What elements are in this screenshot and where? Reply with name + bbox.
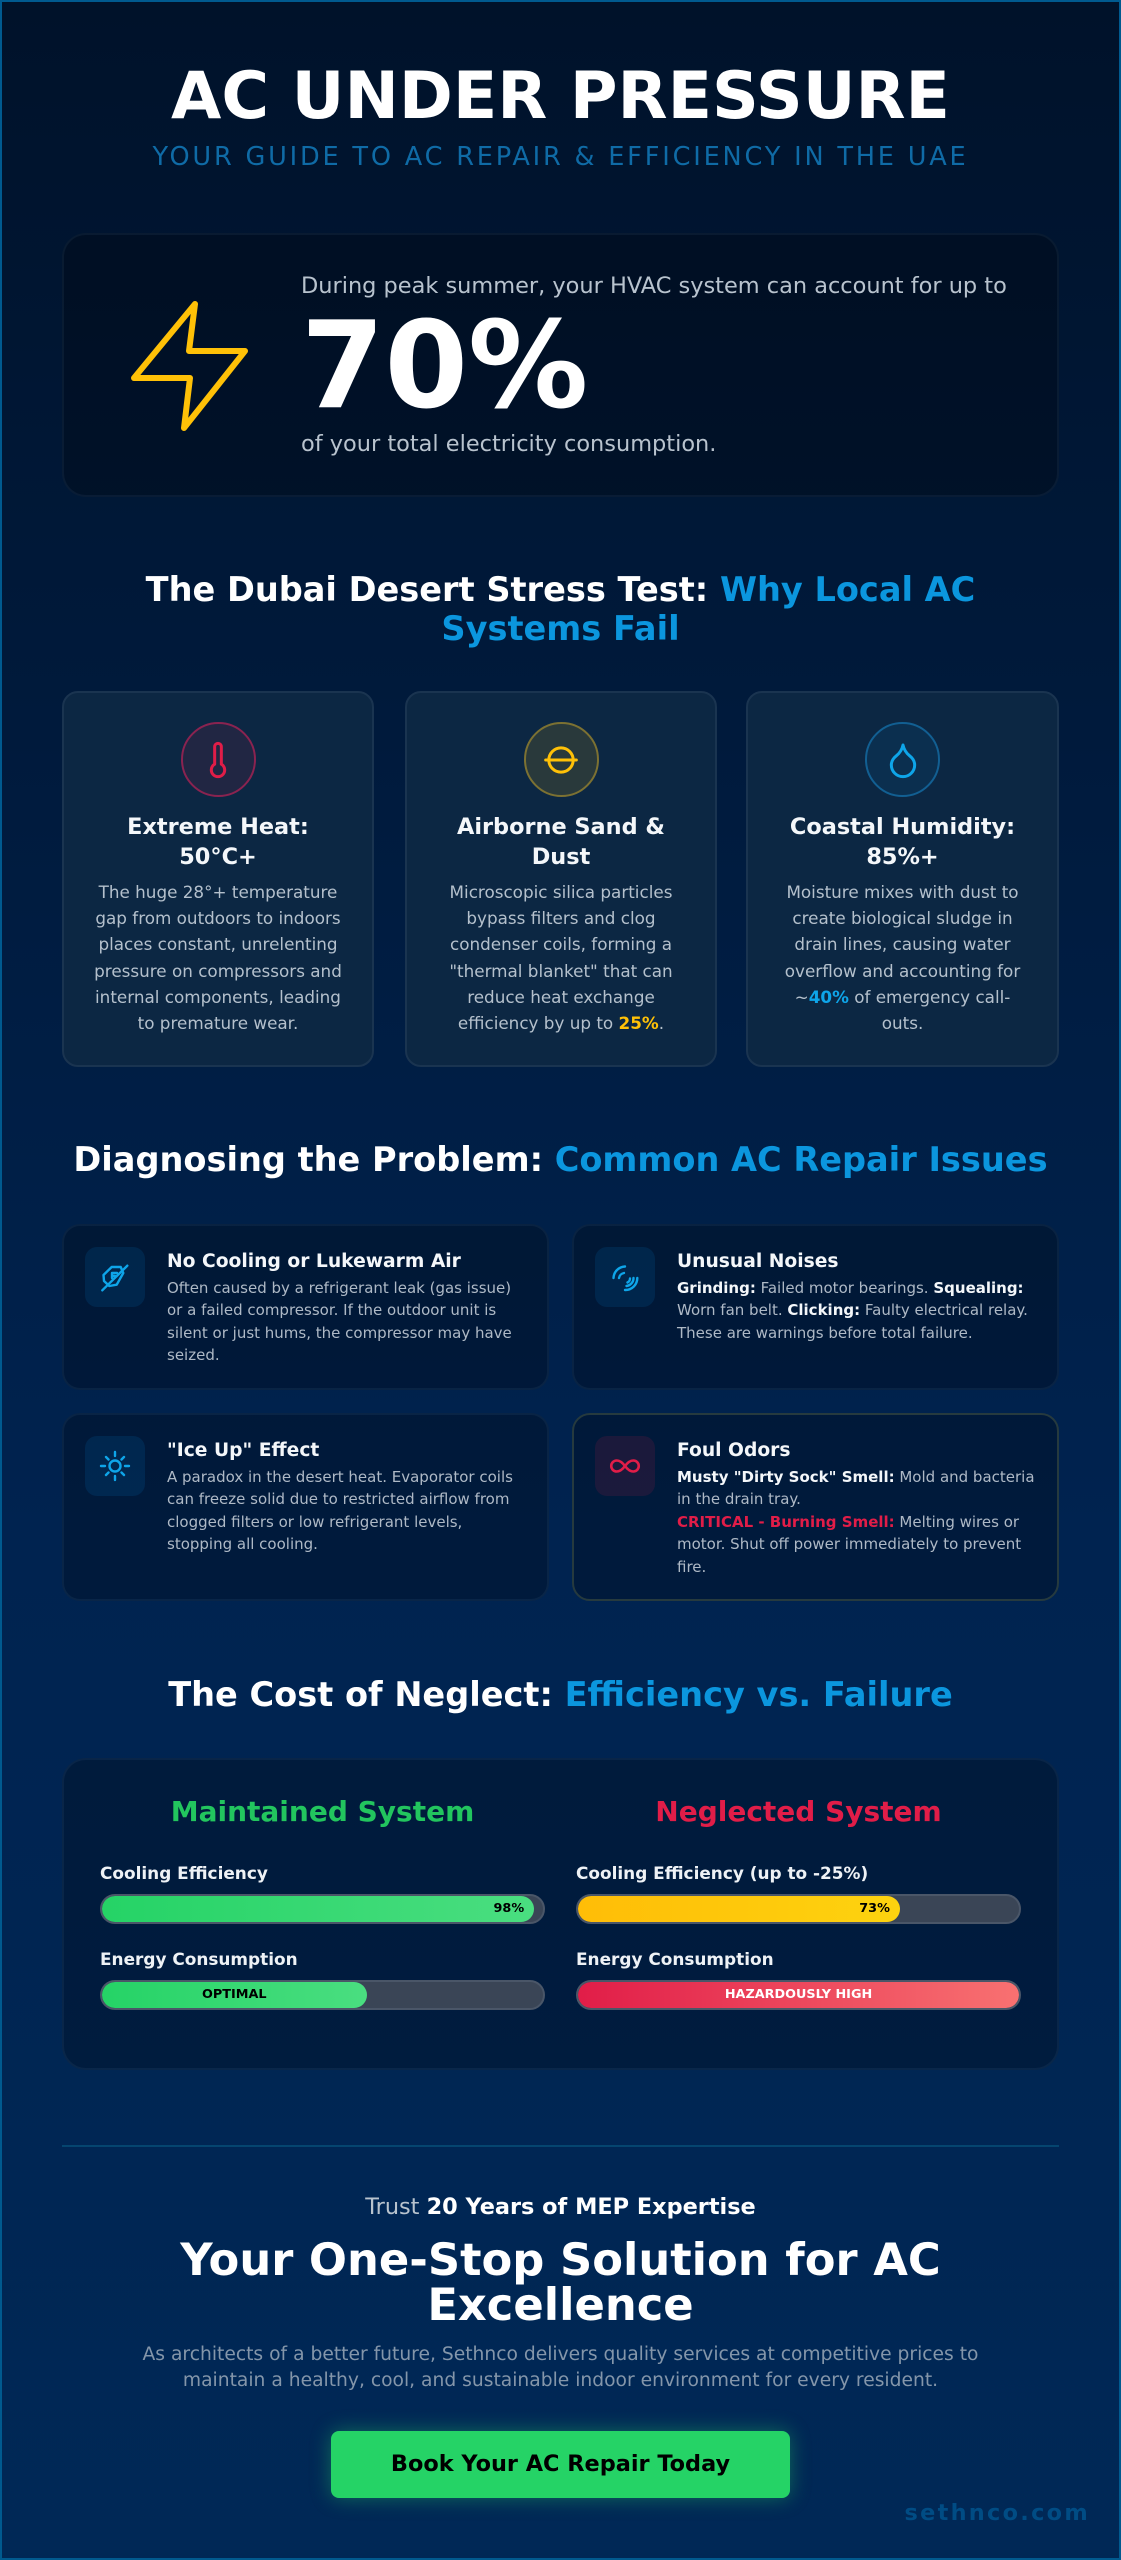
card heading	[790, 814, 1015, 870]
issue text: can freeze solid due to restricted airflow from	[167, 1490, 509, 1508]
issue text: motor. Shut off power immediately to prevent	[677, 1535, 1021, 1553]
panel: unusual noises	[572, 1224, 1059, 1390]
card text: "thermal blanket" that can	[449, 961, 673, 981]
panel: hero statistic	[62, 233, 1059, 497]
issue text: Musty "Dirty Sock" Smell: Mold and bacteria	[677, 1468, 1035, 1486]
issue text: in the drain tray.	[677, 1490, 801, 1508]
neglected system heading: Neglected System	[655, 1795, 942, 1828]
heading: desert stress test: Systems Fail	[441, 609, 680, 648]
card heading	[127, 814, 309, 870]
card text: reduce heat exchange	[467, 987, 655, 1007]
issue text: seized.	[167, 1346, 220, 1364]
bar fill hazardously high: HAZARDOUSLY HIGH	[725, 1987, 872, 2002]
bar fill 98%	[102, 1896, 534, 1922]
heading: common repair issues: Diagnosing the Problem: Common AC Repair Issues	[73, 1140, 1048, 1179]
card text	[449, 882, 673, 1033]
issue text	[167, 1279, 512, 1364]
panel: comparison	[62, 1758, 1059, 2070]
card text: ~40% of emergency call-	[795, 987, 1010, 1007]
issue text: or a failed compressor. If the outdoor unit is	[167, 1301, 496, 1319]
footer paragraph	[142, 2344, 978, 2391]
card text: efficiency by up to 25%.	[458, 1013, 664, 1033]
issue text: stopping all cooling.	[167, 1535, 318, 1553]
bar: maintained energy optimal	[100, 1980, 545, 2010]
card text: condenser coils, forming a	[450, 934, 672, 954]
bar fill optimal	[102, 1982, 367, 2008]
card text: places constant, unrelenting	[98, 934, 338, 954]
issue text: silent or just hums, the compressor may have	[167, 1324, 512, 1342]
label: maintained cooling efficiency: Cooling Efficiency	[100, 1863, 268, 1883]
card text: internal components, leading	[95, 987, 341, 1007]
icon: thermometer	[180, 722, 256, 797]
hero lead-in text: During peak summer, your HVAC system can account for up to	[301, 273, 1007, 299]
card text: bypass filters and clog	[466, 908, 656, 928]
icon: sound waves	[595, 1247, 655, 1307]
issue text: These are warnings before total failure.	[677, 1324, 973, 1342]
card text	[785, 882, 1020, 1033]
bar: maintained cooling efficiency 98%	[100, 1894, 545, 1924]
footer heading: Excellence	[427, 2278, 694, 2331]
issue heading: Foul Odors	[677, 1440, 791, 1460]
heading: desert stress test: The Dubai Desert Stress Test: Why Local AC	[146, 570, 975, 609]
issue text: Worn fan belt. Clicking: Faulty electrical relay.	[677, 1301, 1028, 1319]
bar fill 98%: 98%	[494, 1901, 524, 1916]
issue text: Often caused by a refrigerant leak (gas issue)	[167, 1279, 511, 1297]
panel: extreme heat	[62, 691, 374, 1067]
icon: sun	[85, 1436, 145, 1496]
icon: lightning bolt	[131, 301, 248, 431]
issue text: clogged filters or low refrigerant levels,	[167, 1513, 462, 1531]
card text: Microscopic silica particles	[450, 882, 672, 902]
panel: ice up effect	[62, 1413, 549, 1601]
card heading: 85%+	[866, 844, 939, 870]
issue text: fire.	[677, 1558, 706, 1576]
brand watermark: sethnco.com	[904, 2500, 1090, 2526]
issue heading: "Ice Up" Effect	[167, 1440, 319, 1460]
label: maintained energy consumption: Energy Consumption	[100, 1949, 298, 1969]
card heading: Coastal Humidity:	[790, 814, 1015, 840]
footer heading	[180, 2233, 941, 2331]
heading: desert stress test	[146, 570, 975, 648]
footer paragraph: maintain a healthy, cool, and sustainable indoor environment for every resident.	[183, 2370, 938, 2391]
label: neglected energy consumption: Energy Consumption	[576, 1949, 774, 1969]
call to action button	[331, 2431, 790, 2498]
footer heading: Your One-Stop Solution for AC	[180, 2233, 941, 2286]
label: neglected cooling efficiency: Cooling Efficiency (up to -25%)	[576, 1863, 868, 1883]
icon: infinity	[595, 1436, 655, 1496]
issue text	[677, 1468, 1035, 1576]
footer trust line: Trust 20 Years of MEP Expertise	[365, 2194, 756, 2220]
card text: drain lines, causing water	[794, 934, 1011, 954]
icon: water drop	[865, 722, 940, 797]
hero closing text: of your total electricity consumption.	[301, 431, 716, 457]
bar fill optimal: OPTIMAL	[202, 1987, 267, 2002]
panel: foul odors	[572, 1413, 1059, 1601]
card text: Moisture mixes with dust to	[786, 882, 1019, 902]
footer paragraph: As architects of a better future, Sethnco delivers quality services at competitive prices to	[143, 2344, 978, 2365]
panel: airborne sand and dust	[405, 691, 717, 1067]
issue heading: Unusual Noises	[677, 1250, 839, 1272]
icon: blocked coolant	[85, 1247, 145, 1307]
card heading: 50°C+	[179, 844, 257, 870]
subtitle: YOUR GUIDE TO AC REPAIR & EFFICIENCY IN THE UAE	[152, 142, 969, 172]
issue text: Grinding: Failed motor bearings. Squealing:	[677, 1279, 1024, 1297]
card text: create biological sludge in	[792, 908, 1013, 928]
issue text: CRITICAL - Burning Smell: Melting wires or	[677, 1513, 1019, 1531]
bar fill 73%	[578, 1896, 900, 1922]
card text: outs.	[882, 1013, 923, 1033]
card text	[94, 882, 342, 1033]
card text: pressure on compressors and	[94, 961, 342, 981]
issue heading: No Cooling or Lukewarm Air	[167, 1250, 461, 1272]
bar: neglected cooling efficiency 73%	[576, 1894, 1021, 1924]
maintained system heading: Maintained System	[171, 1795, 474, 1828]
bar fill 73%: 73%	[859, 1901, 890, 1916]
card heading	[457, 814, 665, 870]
issue text	[167, 1468, 513, 1553]
card heading: Extreme Heat:	[127, 814, 309, 840]
heading: cost of neglect: The Cost of Neglect: Efficiency vs. Failure	[168, 1675, 953, 1714]
card heading: Dust	[532, 844, 590, 870]
title: AC UNDER PRESSURE	[171, 59, 950, 134]
card text: The huge 28°+ temperature	[99, 882, 337, 902]
bar: neglected energy hazardous	[576, 1980, 1021, 2010]
icon: dust particle	[524, 722, 598, 797]
card text: overflow and accounting for	[785, 961, 1020, 981]
issue text	[676, 1279, 1028, 1342]
call to action button: Book Your AC Repair Today	[391, 2451, 730, 2477]
panel: coastal humidity	[746, 691, 1059, 1067]
issue text: A paradox in the desert heat. Evaporator coils	[167, 1468, 513, 1486]
card text: to premature wear.	[138, 1013, 298, 1033]
card text: gap from outdoors to indoors	[95, 908, 341, 928]
bar fill hazardously high	[578, 1982, 1019, 2008]
panel: no cooling	[62, 1224, 549, 1390]
hero big number: 70%	[301, 297, 588, 436]
card heading: Airborne Sand &	[457, 814, 665, 840]
